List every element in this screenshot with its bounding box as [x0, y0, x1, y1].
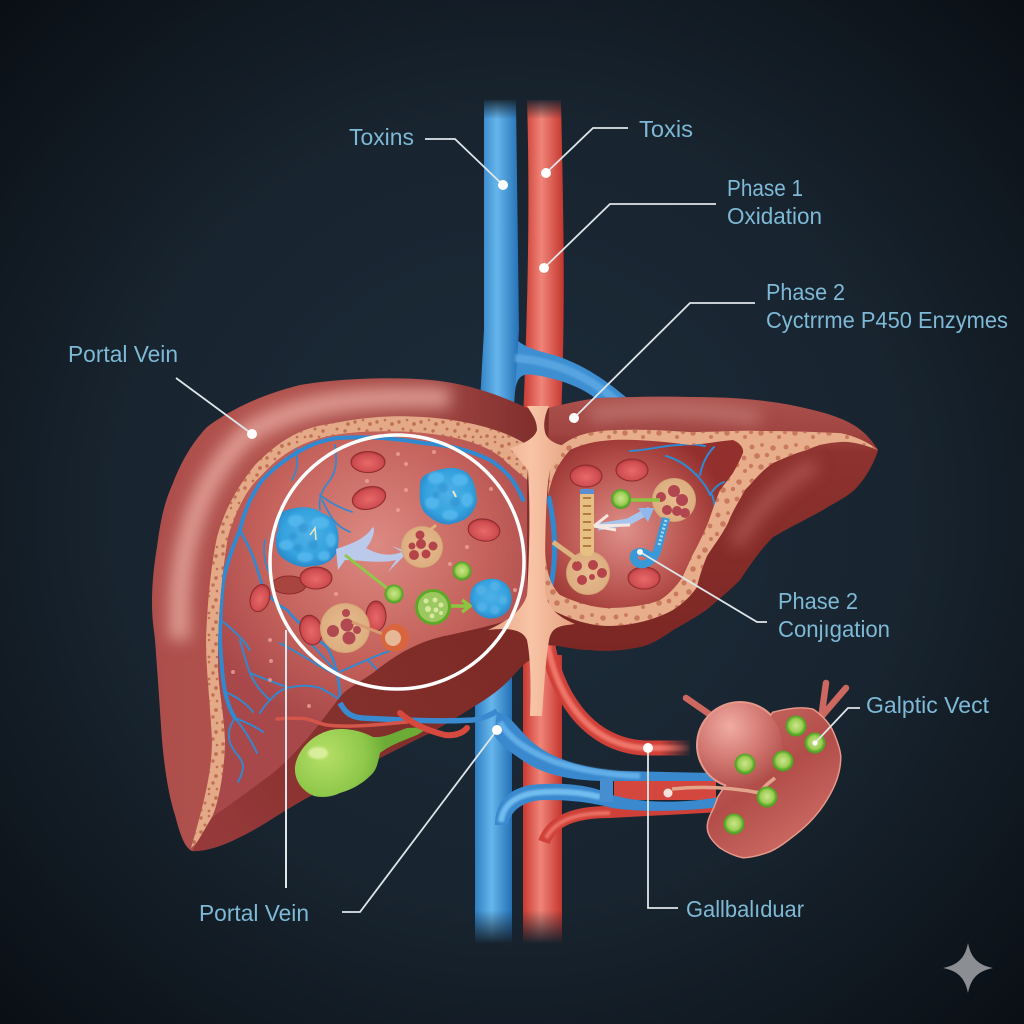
organ sphere [698, 703, 782, 787]
label: Toxins: Toxins [349, 124, 414, 150]
cell top right [652, 478, 696, 522]
label: Portal Vein lower: Portal Vein [199, 900, 309, 926]
right band speckle [540, 430, 878, 626]
duct [672, 778, 775, 793]
label: Phase 1 Oxidation: Phase 1 [727, 175, 803, 201]
green pointer [345, 555, 404, 604]
rim highlights [179, 397, 815, 640]
tube [580, 489, 594, 556]
leader lines [176, 128, 860, 912]
enzyme cluster large left [276, 507, 339, 567]
liver silhouette [152, 378, 878, 851]
label: Phase 2 Conjugation [778, 588, 890, 642]
label: Toxis: Toxis [639, 116, 693, 142]
leader dots [247, 168, 818, 798]
sparkle watermark [943, 943, 993, 993]
organ body [708, 709, 840, 857]
spleen organ [672, 683, 846, 857]
red hepatic vessels [277, 713, 467, 735]
label: Phase 1 Oxidation: Oxidation [727, 203, 822, 229]
label: Portal Vein upper: Portal Vein [68, 341, 178, 367]
right interior contents [549, 444, 724, 589]
lower fold [192, 612, 532, 851]
blue vena cava upper [479, 100, 519, 420]
branches [686, 683, 846, 716]
blue hook tube [634, 518, 666, 564]
enzyme cluster top [420, 468, 477, 524]
blue arrow [336, 527, 408, 572]
green dot [452, 562, 472, 580]
green textured cell [415, 589, 470, 625]
tan cell lower right lobe [553, 542, 610, 595]
veins left [220, 437, 523, 782]
white and blue arrows right [594, 508, 654, 530]
left interior [212, 431, 527, 817]
left blue vessel to portal vein [340, 703, 497, 721]
liver [152, 378, 878, 851]
label: Phase 2 Conjugation: Phase 2 [778, 588, 858, 614]
red aorta lower [523, 655, 562, 944]
red blood cells right [570, 459, 660, 589]
label: Phase 2 Conjugation: Conjıgation [778, 616, 890, 642]
label: Gallbaldr: Gallbalıduar [686, 896, 804, 922]
label: Phase 2 Cytochrome: Phase 2 [766, 279, 845, 305]
right tan band [540, 430, 878, 626]
red aorta upper [523, 100, 564, 420]
gallbladder [295, 727, 430, 797]
right interior [545, 440, 743, 608]
tan cell bottom [320, 603, 409, 653]
label: Phase 2 Cytochrome [766, 279, 1008, 333]
left band speckle [191, 416, 530, 848]
speckles [231, 450, 517, 708]
left interior contents [220, 437, 523, 782]
veins right [549, 444, 724, 585]
green pointer right [611, 489, 660, 509]
blue upper branch [494, 712, 716, 781]
tan cell top [401, 525, 443, 568]
blue vena cava lower [475, 660, 512, 944]
red blood cells left [247, 452, 501, 647]
label: Phase 2 Cytochrome: Cyctrrme P450 Enzymes [766, 307, 1008, 333]
green dots [724, 716, 826, 834]
blue connector [600, 778, 613, 802]
right lobe base [545, 397, 878, 651]
red inner vessel [614, 780, 716, 800]
vessels behind the liver [475, 100, 634, 944]
blue branch [515, 341, 626, 398]
blue lower branch [495, 784, 720, 825]
blue branch highlight [515, 358, 618, 402]
label: Galptic Vect: Galptic Vect [866, 692, 990, 718]
organ outline [696, 701, 840, 857]
enzyme cluster small [470, 579, 512, 619]
left tan band [191, 416, 530, 848]
magnifier circle [270, 435, 524, 689]
label: Phase 1 Oxidation [727, 175, 822, 229]
central ligament [488, 406, 575, 716]
red artery to spleen [547, 640, 690, 748]
lower red vessel [544, 806, 722, 842]
